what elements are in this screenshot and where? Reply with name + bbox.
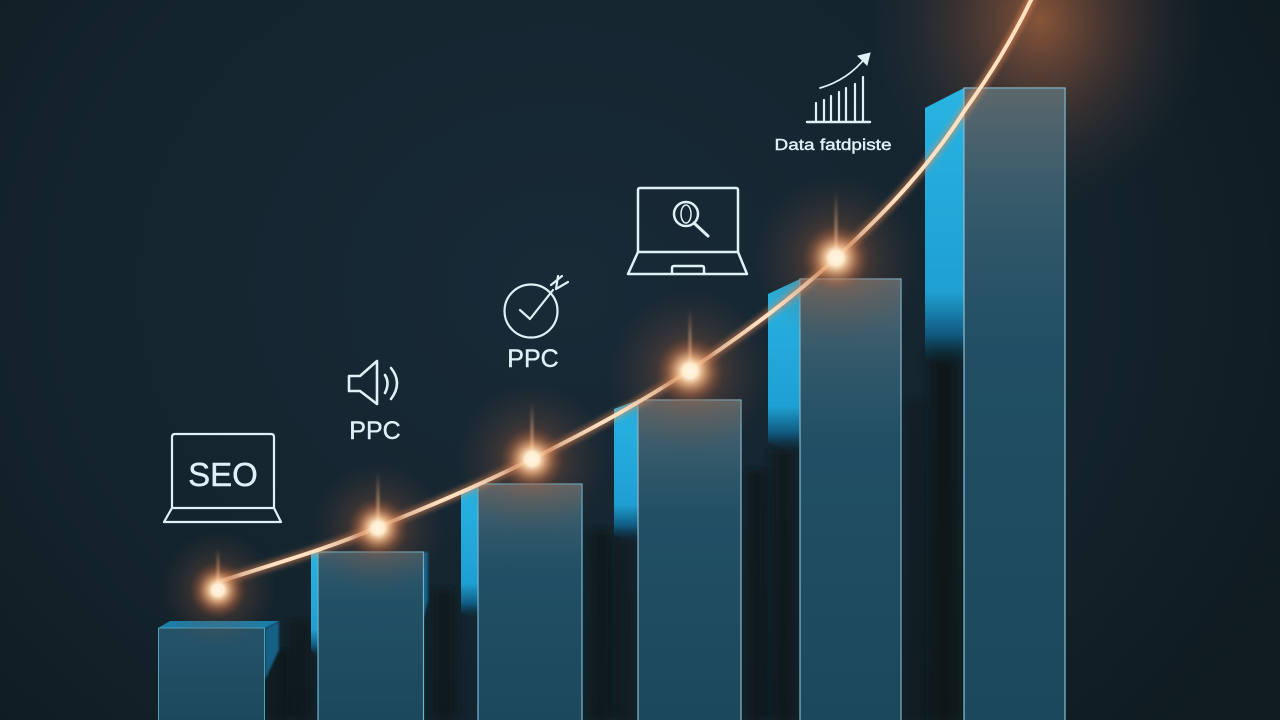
bar 1 (158, 621, 292, 720)
glowing node 5 (752, 174, 920, 342)
icon: target check (504, 276, 568, 338)
glowing node 1 (160, 532, 276, 648)
PPC label one: PPC (349, 417, 401, 445)
Data label: Data fatdpiste (774, 137, 892, 154)
PPC label two: PPC (507, 345, 559, 373)
bar 2 (290, 552, 456, 720)
upper right orange haze (870, 0, 1210, 210)
icon: SEO laptop (164, 434, 281, 522)
glowing node 3 (456, 383, 608, 535)
bar 5 (768, 279, 901, 720)
bar 3 (461, 484, 612, 720)
icon: megaphone speaker (349, 361, 397, 404)
glowing node 2 (312, 462, 444, 594)
SEO label: SEO (188, 456, 258, 493)
glowing node 4 (608, 289, 772, 453)
bar chart (158, 88, 1065, 720)
growth curve (218, 0, 1033, 582)
icon: search laptop (628, 188, 747, 274)
bar 4 (614, 400, 766, 720)
bar 6 (908, 88, 1065, 720)
icon: rising bar chart (807, 53, 870, 122)
